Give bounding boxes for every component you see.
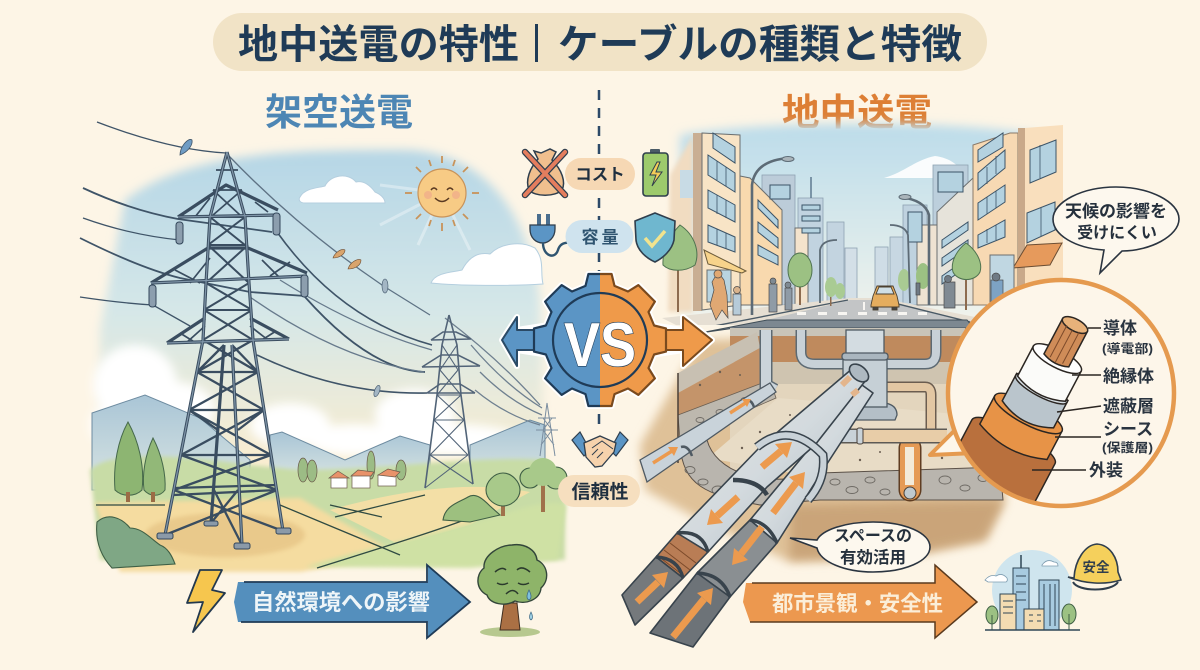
tower: large highlight [151,152,307,545]
icon: handshake [572,432,628,467]
wires [80,122,542,425]
speech bubble: space: 有効活用 [840,548,906,567]
pill: reliability [558,475,640,507]
panel: overhead scene [80,122,567,572]
title: ケーブルの種類と特徴 [558,23,962,67]
car [871,286,899,310]
icon: safety helmet [1068,544,1121,590]
heading: underground transmission: 地中送電 [782,92,932,133]
speech bubble: weather [1053,187,1179,273]
road deck [700,320,975,333]
pill: cost: コスト [575,166,625,184]
magnified cable callout [930,280,1174,542]
sidewalks and road [662,298,974,325]
trees: round [97,458,567,568]
gravel [680,398,1003,505]
cable labels: シース [1103,420,1153,439]
cable labels: 導体 [1103,319,1137,338]
speech bubble: space [790,522,930,572]
central vault column [835,330,897,420]
trees: cypress [115,422,165,502]
cloud [431,244,543,285]
back pipes [766,330,947,499]
icon: safety helmet: 安全 [1082,559,1110,575]
pill: reliability: 信頼性 [571,481,629,503]
cable labels: (導電部) [1102,341,1153,356]
title: 地中送電の特性 [238,23,519,67]
far hills and fields [90,456,565,560]
street trees [663,225,981,312]
conduit collar [757,435,823,500]
sun [380,156,479,250]
pill: capacity [566,220,634,253]
leader lines [1032,328,1101,470]
cloud [884,156,965,178]
sky [100,150,545,470]
cloud [299,176,385,203]
speech bubble: weather: 受けにくい [1077,223,1157,242]
cable labels: 遮蔽層 [1103,396,1154,416]
back wall [730,328,965,470]
icon: plug [530,214,572,256]
main conduit B [650,385,873,647]
cable labels: 絶縁体 [1103,366,1154,386]
title [213,13,987,71]
insulators and footings [149,213,308,549]
pedestrians [710,270,1003,320]
city sky [680,124,1040,320]
awnings and shopfronts [704,243,1062,305]
VS gear with arrows: VS [564,311,636,380]
arrow text: 自然環境への影響 [252,590,430,615]
cable cutaway [960,316,1088,501]
lens body and tail [930,280,1174,506]
near buildings [668,135,693,312]
blue arrow [234,565,470,638]
cable labels [1089,319,1154,480]
floor [708,398,1000,478]
small left conduit [640,383,776,482]
panel: underground cross-section [622,320,1005,647]
tower: distant [536,403,558,456]
central comparison column [502,149,712,507]
icon: money bag crossed out [525,149,565,195]
icon: sad tree [478,545,547,637]
cable labels: 外装 [1089,461,1123,480]
speech bubble: space: スペースの [834,528,912,545]
mid buildings [740,176,973,306]
street lamps [752,156,929,315]
shadow under tower [145,513,305,557]
panel: city street scene [662,124,1063,332]
windows [708,133,1056,284]
icon: battery [643,149,668,196]
village houses [298,451,406,488]
soil mass [640,330,1005,562]
main conduit A [622,361,872,625]
pill: cost [565,158,635,190]
distant buildings [762,165,968,306]
VS gear with arrows [502,274,712,406]
icon: city [985,550,1080,630]
heading: overhead transmission: 架空送電 [265,92,413,133]
speech bubble: weather: 天候の影響を [1065,201,1167,221]
callout arrow: natural environment impact [187,565,470,638]
mountains [92,395,545,490]
tower: medium [422,315,480,488]
left soil strata [678,332,760,393]
center dashed divider [598,90,600,430]
birds [180,139,388,397]
callout arrow: urban landscape and safety [743,565,977,638]
direction arrows [637,377,858,637]
icon: lightning bolt [187,570,225,632]
clouds: soft background [90,345,520,456]
icon: shield check [635,213,675,262]
cable labels: (保護層) [1102,441,1153,455]
pill: capacity: 容量 [582,227,618,247]
tower: large [151,152,307,545]
window mullions [717,145,1041,249]
arrow text: 都市景観・安全性 [772,592,943,616]
